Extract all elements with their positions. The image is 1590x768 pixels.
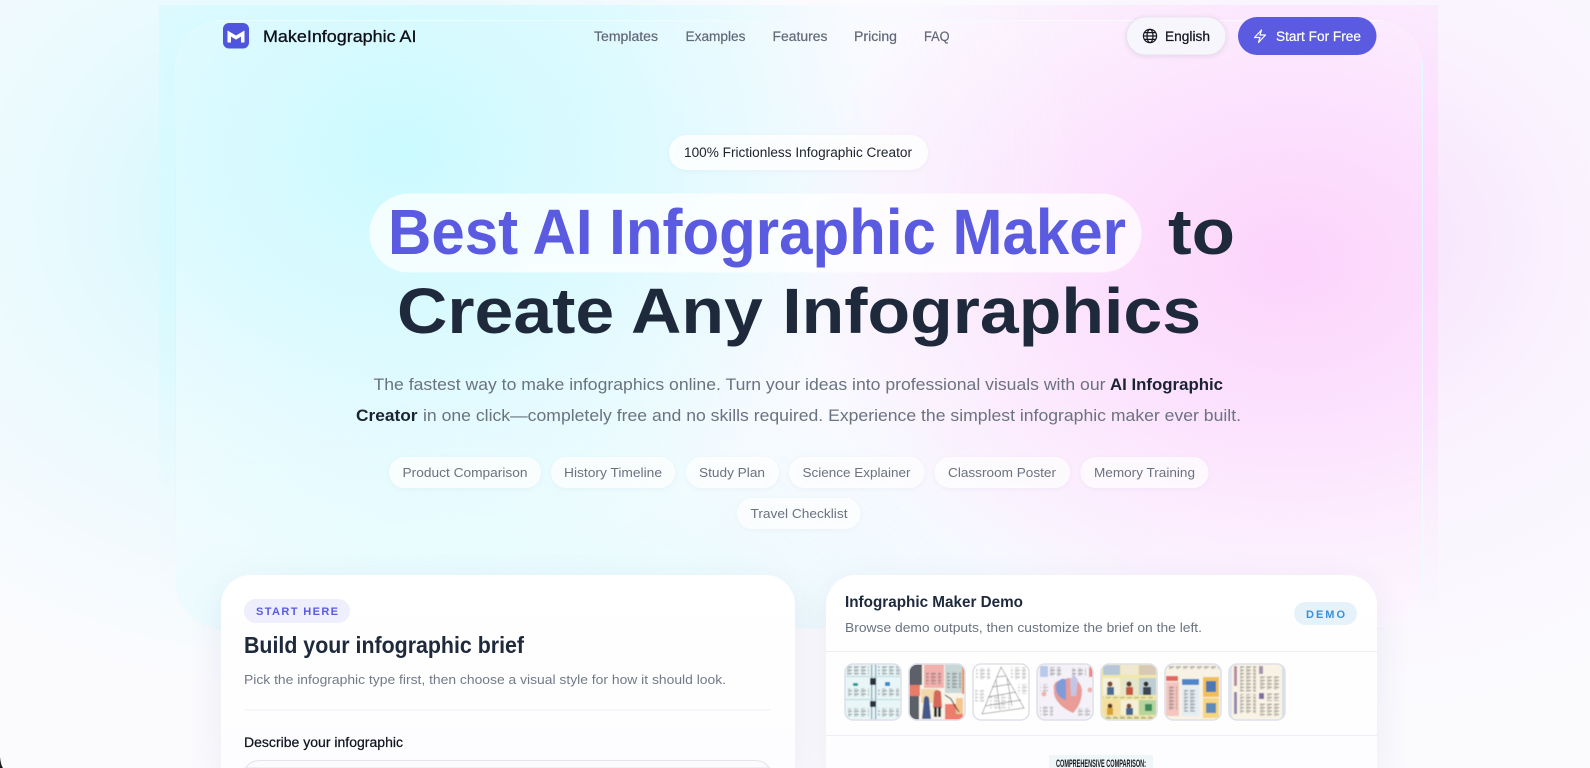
- chip: travel checklist: Travel Checklist: [750, 506, 848, 521]
- language button: English: [1165, 29, 1210, 44]
- intro paragraph: Creator: [356, 406, 418, 425]
- title: Best AI Infographic Maker: [388, 196, 1126, 268]
- demo panel content: [826, 594, 1377, 768]
- thumbnail strip: [845, 664, 1285, 720]
- hero panel: [175, 20, 1423, 629]
- chip: memory training: Memory Training: [1094, 465, 1195, 480]
- chip: study plan: [686, 457, 779, 488]
- thumbnail: reading guide: [1165, 664, 1221, 720]
- panel: demo card: [826, 575, 1377, 768]
- navigation links: [594, 29, 950, 44]
- navigation links: Templates: [594, 29, 658, 44]
- brand name: MakeInfographic AI: [263, 27, 416, 46]
- chip: product comparison: [389, 457, 541, 488]
- demo description: Browse demo outputs, then customize the brief on the left.: [845, 620, 1202, 635]
- panel: brief form card: [221, 575, 795, 768]
- start here pill: [244, 599, 350, 623]
- thumbnail: memory notes: [1229, 664, 1285, 720]
- thumbnail borders: [845, 664, 1285, 720]
- chip: history timeline: [551, 457, 675, 488]
- chip: memory training: [1080, 457, 1208, 488]
- form description: Pick the infographic type first, then choose a visual style for how it should look.: [244, 672, 726, 687]
- navigation links: FAQ: [924, 29, 950, 44]
- chip: study plan: Study Plan: [699, 465, 765, 480]
- language button: [1126, 17, 1226, 55]
- field label: Describe your infographic: [244, 735, 403, 750]
- icon: lightning bolt: [1254, 30, 1266, 42]
- background band: [159, 5, 1438, 492]
- demo pill: DEMO: [1306, 609, 1345, 621]
- navigation links: Examples: [686, 29, 746, 44]
- navigation links: Features: [772, 29, 828, 44]
- navigation bar: [223, 17, 1376, 55]
- title: Create Any Infographics: [397, 275, 1201, 347]
- badge: frictionless: 100% Frictionless Infographic Creator: [684, 145, 913, 160]
- badge: frictionless: [669, 135, 928, 170]
- form heading: Build your infographic brief: [244, 632, 524, 658]
- intro paragraph: [356, 375, 1241, 425]
- thumbnail: pyramid sketch: [974, 666, 1028, 715]
- brief form content: [244, 599, 771, 768]
- start for free button: Start For Free: [1276, 29, 1361, 44]
- topic chips: [389, 457, 1208, 529]
- navigation links: Pricing: [854, 29, 897, 44]
- start for free button: [1238, 17, 1376, 55]
- intro paragraph: AI Infographic: [1110, 375, 1223, 394]
- chip: history timeline: History Timeline: [564, 465, 662, 480]
- title: [370, 194, 1235, 347]
- chip: classroom poster: [934, 457, 1070, 488]
- demo pill: [1294, 602, 1357, 625]
- chip: product comparison: Product Comparison: [402, 465, 528, 480]
- thumbnail: history timeline: [909, 664, 965, 720]
- icon: logo: [223, 23, 249, 48]
- icon: globe: [1143, 29, 1157, 43]
- title: to: [1168, 196, 1235, 268]
- chip: classroom poster: Classroom Poster: [948, 465, 1057, 480]
- thumbnail: heart anatomy: [1037, 664, 1093, 720]
- window corner: [0, 757, 3, 768]
- chip: science explainer: [789, 457, 924, 488]
- chip: science explainer: Science Explainer: [802, 465, 911, 480]
- demo title: Infographic Maker Demo: [845, 594, 1023, 611]
- text input: [244, 760, 770, 768]
- intro paragraph: in one click—completely free and no skills required. Experience the simplest infographic maker ever built.: [423, 406, 1241, 425]
- title highlight pill: [370, 194, 1141, 272]
- thumbnail: comic classroom: [1101, 664, 1157, 720]
- thumbnail: comparison: [845, 664, 901, 720]
- chip: travel checklist: [737, 498, 860, 529]
- preview infographic header: [1049, 755, 1153, 768]
- intro paragraph: The fastest way to make infographics online. Turn your ideas into professional visuals with our: [374, 375, 1106, 394]
- start here pill: START HERE: [256, 606, 338, 618]
